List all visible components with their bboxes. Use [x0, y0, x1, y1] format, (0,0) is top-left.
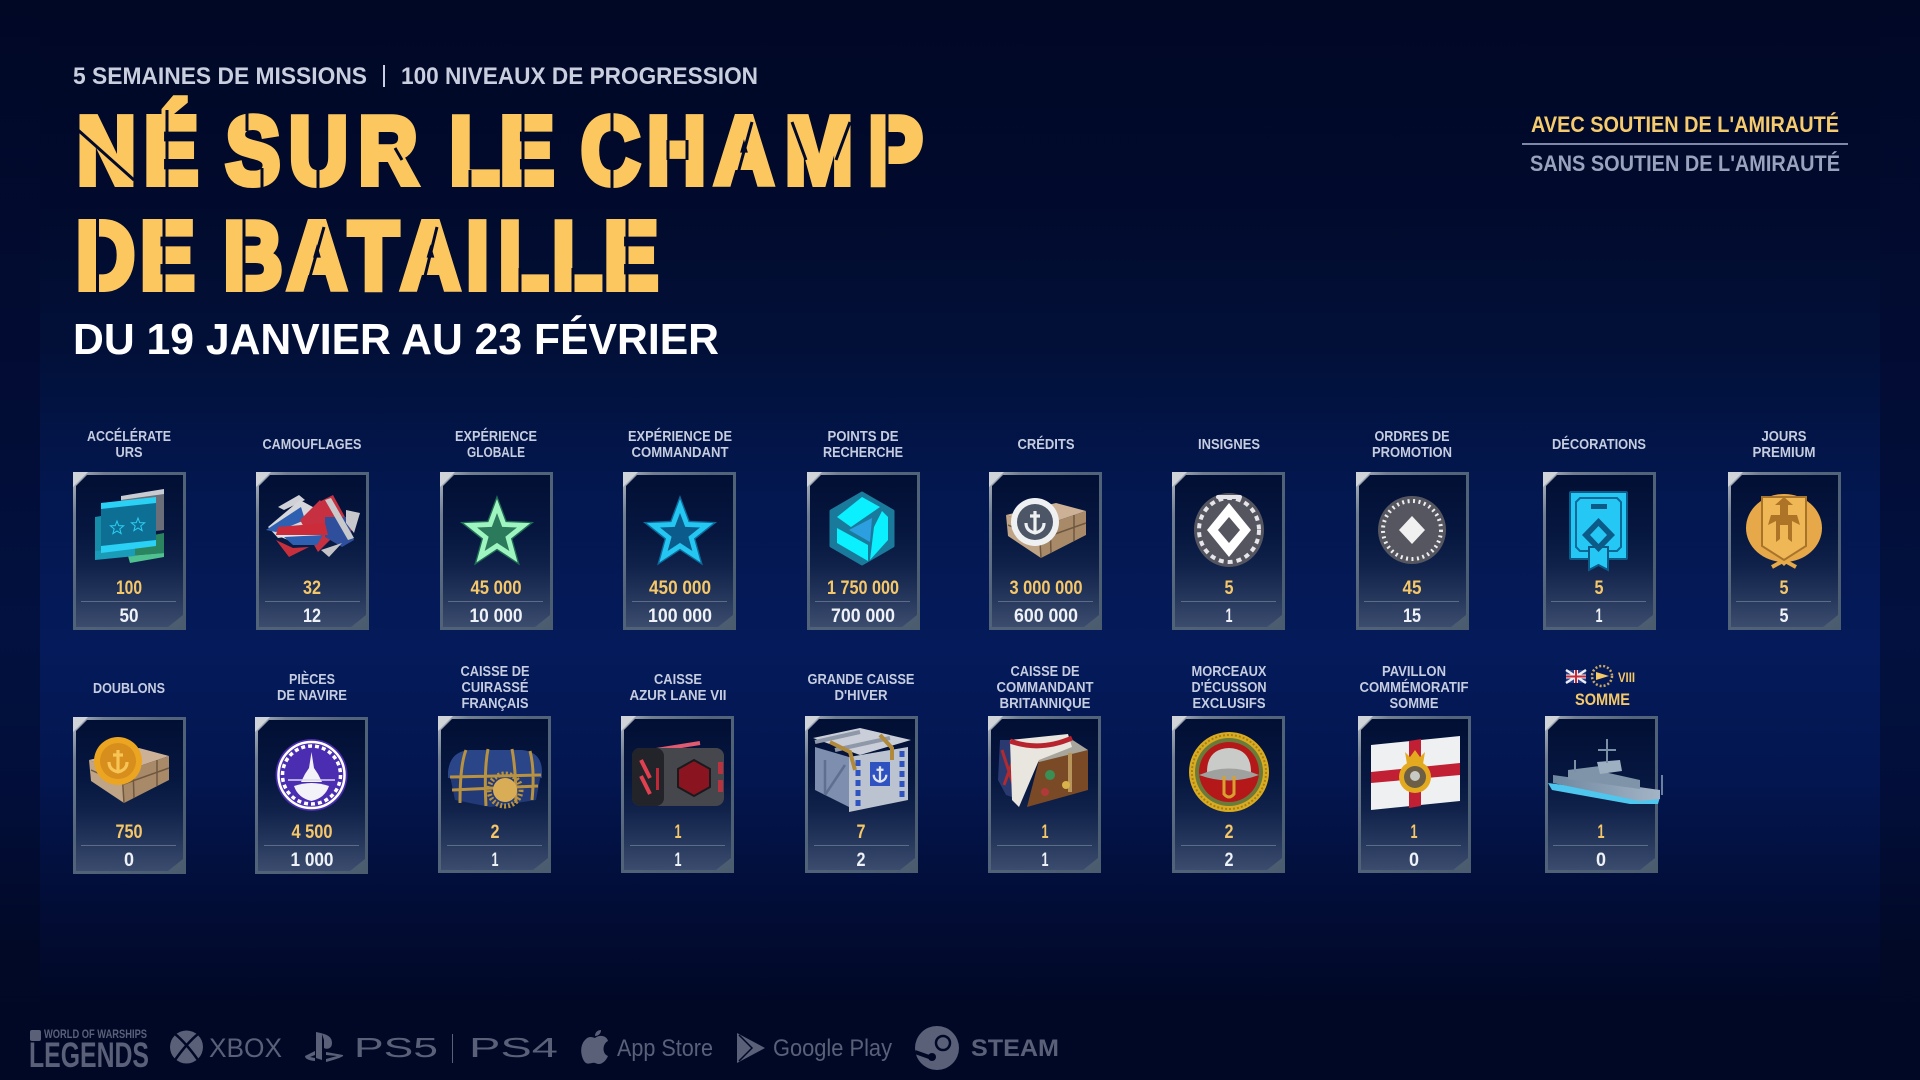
- reward: expérience de commandant: [623, 428, 736, 630]
- reward: ordres de promotion: 45: [1402, 577, 1422, 599]
- icon: winter crate: [813, 728, 911, 812]
- icon: helmet patch: [1189, 732, 1269, 812]
- reward: somme ship: 1: [1598, 821, 1605, 843]
- reward: caisse de commandant britannique: 1: [1042, 821, 1049, 843]
- icon: british chest: [998, 734, 1088, 807]
- reward: caisse de cuirassé français: FRANÇAIS: [462, 696, 529, 712]
- reward: jours premium: 5: [1780, 605, 1789, 627]
- reward: caisse azur lane: 1: [674, 821, 682, 843]
- reward: décorations: DÉCORATIONS: [1552, 436, 1646, 453]
- reward: points de recherche: POINTS DE: [828, 429, 899, 445]
- reward: jours premium: [1728, 429, 1841, 630]
- reward: doublons: [73, 681, 186, 874]
- icon: decoration certificate: [1569, 491, 1628, 570]
- reward: points de recherche: 1 750 000: [827, 577, 899, 599]
- reward: crédits: 3 000 000: [1010, 577, 1083, 599]
- reward: expérience de commandant: EXPÉRIENCE DE: [628, 428, 732, 445]
- icon: azur lane crate: [632, 743, 724, 806]
- icon: premium laurel shield: [1746, 494, 1822, 567]
- reward: accélérateurs: [73, 428, 186, 630]
- reward: grande caisse d'hiver: 7: [856, 821, 866, 843]
- reward: somme ship: [1545, 666, 1662, 873]
- icon: insignia: [1194, 493, 1264, 567]
- reward: expérience globale: GLOBALE: [467, 445, 525, 461]
- reward: morceaux d'écusson exclusifs: D'ÉCUSSON: [1192, 679, 1266, 696]
- reward: camouflages: 32: [303, 577, 321, 599]
- reward: morceaux d'écusson exclusifs: 2: [1224, 821, 1234, 843]
- reward: pavillon commémoratif somme: 0: [1409, 849, 1419, 871]
- date line: DU 19 JANVIER AU 23 FÉVRIER: [73, 314, 719, 364]
- reward: pavillon commémoratif somme: 1: [1410, 821, 1418, 843]
- subtitle: missions and levels: [73, 63, 758, 90]
- reward: pièces de navire: 1 000: [290, 849, 334, 871]
- reward: grande caisse d'hiver: D'HIVER: [834, 688, 888, 704]
- reward: ordres de promotion: PROMOTION: [1372, 445, 1452, 461]
- reward: morceaux d'écusson exclusifs: EXCLUSIFS: [1192, 696, 1266, 712]
- reward: accélérateurs: 50: [120, 605, 139, 627]
- reward: caisse de commandant britannique: CAISSE DE: [1010, 664, 1080, 680]
- reward: morceaux d'écusson exclusifs: 2: [1224, 849, 1234, 871]
- icon: camouflage patches: [266, 495, 360, 557]
- footer: Google Play: [737, 1033, 892, 1063]
- reward: insignes: 1: [1226, 605, 1233, 627]
- reward: accélérateurs: URS: [116, 445, 143, 461]
- footer: PlayStation: PS4: [469, 1032, 558, 1063]
- reward: caisse azur lane: AZUR LANE VII: [630, 688, 726, 704]
- reward: ordres de promotion: ORDRES DE: [1374, 429, 1450, 445]
- legend: AVEC SOUTIEN DE L'AMIRAUTÉ: [1531, 112, 1839, 137]
- icon: blue star: [643, 495, 717, 566]
- reward: crédits: 600 000: [1014, 605, 1078, 627]
- reward: caisse de cuirassé français: CAISSE DE: [460, 664, 530, 680]
- footer: game logo: WORLD OF WARSHIPS: [44, 1029, 147, 1041]
- footer: Google Play: Google Play: [773, 1035, 892, 1062]
- reward: caisse azur lane: [621, 672, 734, 873]
- reward: camouflages: 12: [303, 605, 321, 627]
- reward: grande caisse d'hiver: [805, 672, 918, 873]
- icon: destroyer class: [1592, 666, 1612, 686]
- reward: caisse de cuirassé français: [438, 664, 551, 873]
- footer: App Store: App Store: [617, 1035, 713, 1062]
- icon: commemorative flag: [1371, 736, 1460, 810]
- reward: morceaux d'écusson exclusifs: MORCEAUX: [1192, 664, 1267, 680]
- footer: PlayStation: [305, 1032, 558, 1063]
- reward: ordres de promotion: [1356, 429, 1469, 630]
- title: NÉ SUR LE CHAMP: [77, 96, 923, 204]
- reward: camouflages: CAMOUFLAGES: [262, 437, 362, 453]
- reward: décorations: [1543, 436, 1656, 630]
- reward: expérience globale: [440, 428, 553, 630]
- reward: caisse azur lane: 1: [674, 849, 682, 871]
- reward: pièces de navire: DE NAVIRE: [277, 688, 347, 704]
- reward: somme ship: 0: [1596, 849, 1606, 871]
- reward: insignes: INSIGNES: [1198, 437, 1260, 453]
- reward: pavillon commémoratif somme: SOMME: [1390, 696, 1439, 712]
- icon: order medal: [1378, 496, 1446, 564]
- reward: morceaux d'écusson exclusifs: [1172, 664, 1285, 873]
- reward: pavillon commémoratif somme: COMMÉMORATIF: [1360, 679, 1469, 696]
- reward: caisse azur lane: CAISSE: [654, 672, 702, 688]
- reward: doublons: 750: [116, 821, 143, 843]
- reward: accélérateurs: 100: [116, 577, 142, 599]
- footer: Steam: STEAM: [971, 1035, 1059, 1062]
- title: [76, 96, 923, 309]
- reward: expérience de commandant: 100 000: [648, 605, 712, 627]
- legend: [1522, 112, 1848, 176]
- reward: expérience globale: 10 000: [470, 605, 523, 627]
- reward: jours premium: 5: [1780, 577, 1789, 599]
- reward: points de recherche: RECHERCHE: [823, 445, 903, 461]
- reward: points de recherche: [807, 429, 920, 630]
- icon: UK flag: [1566, 670, 1586, 683]
- icon: ship: [1548, 739, 1662, 804]
- subtitle: missions and levels: 100 NIVEAUX DE PROGRESSION: [401, 63, 758, 90]
- reward: somme ship: SOMME: [1575, 690, 1630, 709]
- icon: ship parts: [276, 739, 348, 811]
- reward: décorations: 5: [1594, 577, 1604, 599]
- icon: research hexagon: [831, 493, 893, 564]
- reward: expérience globale: 45 000: [470, 577, 522, 599]
- reward: jours premium: JOURS: [1762, 429, 1807, 445]
- reward: caisse de commandant britannique: 1: [1042, 849, 1049, 871]
- reward: caisse de cuirassé français: 2: [490, 821, 500, 843]
- reward: crédits: CRÉDITS: [1018, 436, 1075, 453]
- reward: ordres de promotion: 15: [1403, 605, 1421, 627]
- footer: PlayStation: PS5: [354, 1032, 438, 1063]
- icon: green star: [460, 495, 534, 566]
- reward: camouflages: [256, 437, 369, 630]
- reward: pavillon commémoratif somme: PAVILLON: [1382, 664, 1446, 680]
- icon: flags: [95, 489, 164, 563]
- subtitle: missions and levels: 5 SEMAINES DE MISSIONS: [73, 63, 367, 90]
- reward: caisse de cuirassé français: 1: [492, 849, 499, 871]
- reward: caisse de cuirassé français: CUIRASSÉ: [462, 679, 529, 696]
- reward: pièces de navire: 4 500: [292, 821, 333, 843]
- reward: jours premium: PREMIUM: [1752, 445, 1816, 461]
- reward: crédits: [989, 436, 1102, 630]
- icon: credits crate: [1006, 498, 1086, 558]
- reward: doublons: DOUBLONS: [93, 681, 165, 697]
- reward: caisse de commandant britannique: BRITANNIQUE: [1000, 696, 1091, 712]
- footer: game logo: [29, 1029, 149, 1075]
- footer: Steam: [915, 1026, 1059, 1070]
- footer: Xbox: [170, 1030, 282, 1064]
- reward: décorations: 1: [1596, 605, 1603, 627]
- footer: Xbox: XBOX: [209, 1033, 282, 1063]
- reward: points de recherche: 700 000: [831, 605, 895, 627]
- reward: pavillon commémoratif somme: [1358, 664, 1471, 873]
- reward: pièces de navire: [255, 671, 368, 874]
- reward: expérience de commandant: COMMANDANT: [632, 445, 729, 461]
- reward: insignes: [1172, 437, 1285, 630]
- icon: doubloons crate: [89, 737, 169, 803]
- footer: game logo: LEGENDS: [29, 1036, 149, 1075]
- reward: insignes: 5: [1224, 577, 1234, 599]
- title: DE BATAILLE: [76, 201, 658, 309]
- legend: SANS SOUTIEN DE L'AMIRAUTÉ: [1530, 151, 1840, 176]
- footer: App Store: [581, 1030, 713, 1064]
- reward: somme ship: VIII: [1618, 669, 1635, 685]
- reward: caisse de commandant britannique: [988, 664, 1101, 873]
- reward: doublons: 0: [124, 849, 134, 871]
- reward: expérience de commandant: 450 000: [649, 577, 711, 599]
- reward: pièces de navire: PIÈCES: [289, 671, 335, 688]
- reward: grande caisse d'hiver: 2: [856, 849, 866, 871]
- reward: accélérateurs: ACCÉLÉRATE: [87, 428, 171, 445]
- icon: french chest: [448, 749, 542, 807]
- reward: caisse de commandant britannique: COMMANDANT: [996, 680, 1094, 696]
- reward: expérience globale: EXPÉRIENCE: [455, 428, 537, 445]
- reward: grande caisse d'hiver: GRANDE CAISSE: [808, 672, 915, 688]
